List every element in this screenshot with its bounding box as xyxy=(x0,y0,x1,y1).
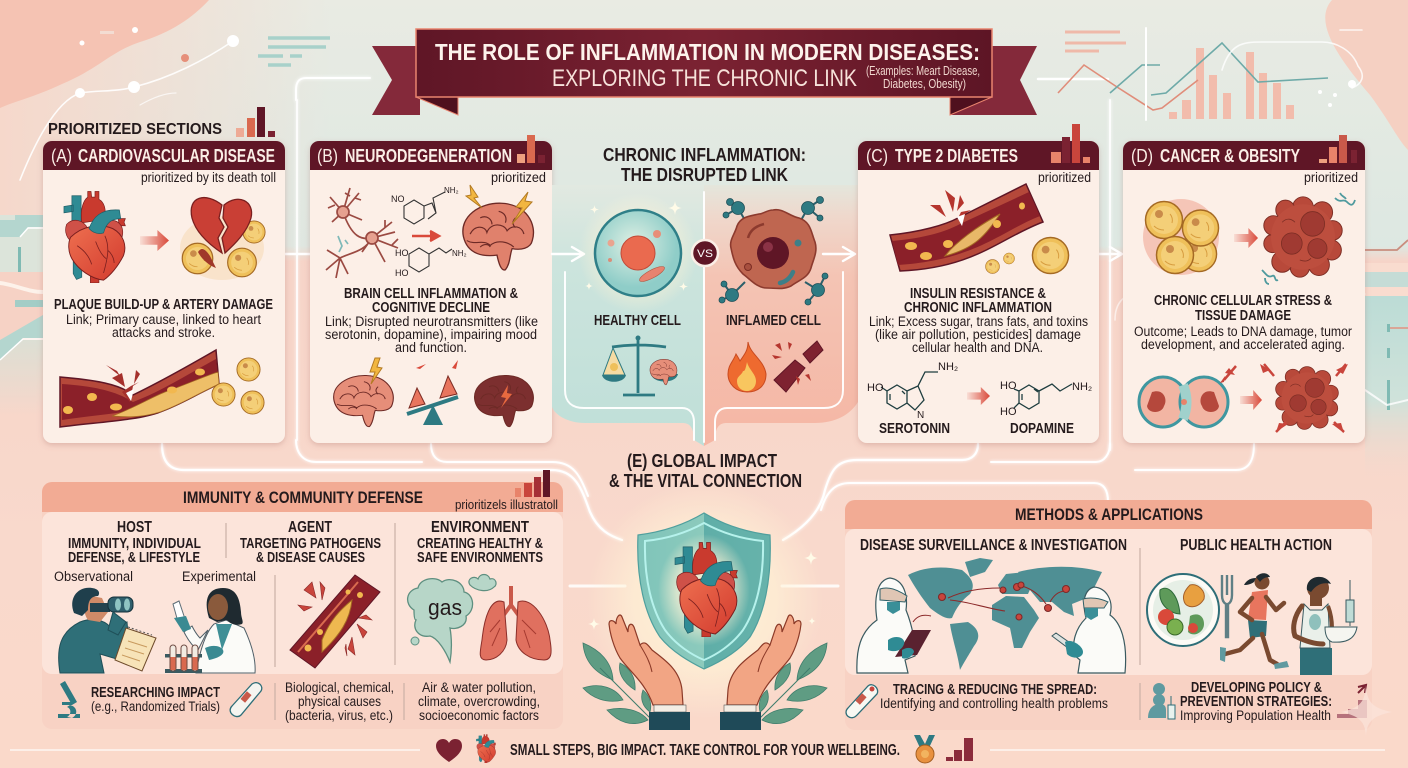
global impact heading xyxy=(609,451,802,491)
prioritized sections label: PRIORITIZED SECTIONS xyxy=(48,121,222,138)
bars xyxy=(515,470,550,497)
teal half xyxy=(552,185,704,446)
title line two: EXPLORING THE CHRONIC LINK xyxy=(552,65,857,92)
bar icon xyxy=(236,107,275,137)
icon: gas cloud xyxy=(408,574,496,662)
heading D: (D) xyxy=(1131,146,1153,166)
icon: person with bowl and syringe xyxy=(1294,577,1357,675)
column: environment: CREATING HEALTHY & xyxy=(417,536,543,552)
icon: scientist xyxy=(165,588,255,673)
footer: researching impact: (e.g., Randomized Trials) xyxy=(91,699,220,714)
decorative chart top right xyxy=(1058,28,1362,120)
icon: brain with lightning xyxy=(463,185,533,270)
title examples note: (Examples: Meart Disease, xyxy=(866,63,980,78)
icon: healthy brain xyxy=(334,358,393,427)
icon: neurons xyxy=(326,188,398,278)
left leaves xyxy=(583,643,651,724)
dopamine structure: HO xyxy=(1000,406,1017,418)
icon: molecules: HO xyxy=(395,268,408,278)
bars xyxy=(517,135,545,163)
icon: anatomical heart xyxy=(476,734,496,763)
sub-heading: TISSUE DAMAGE xyxy=(1195,308,1291,324)
sub-heading: CHRONIC CELLULAR STRESS & xyxy=(1154,293,1332,309)
VS badge xyxy=(692,240,718,266)
heading A: CARDIOVASCULAR DISEASE xyxy=(78,146,275,166)
pink half xyxy=(704,185,858,446)
title examples note xyxy=(866,63,980,91)
sub-heading xyxy=(344,286,518,316)
right leaves xyxy=(759,643,827,724)
heart xyxy=(675,542,737,637)
panel: immunity and community defense xyxy=(42,470,563,729)
label healthy: HEALTHY CELL xyxy=(594,312,681,329)
bars xyxy=(1051,124,1090,163)
heading C: (C) xyxy=(866,146,888,166)
icon: broken heart and fat cells xyxy=(180,198,265,280)
panel: C type 2 diabetes xyxy=(858,124,1099,443)
sub-heading: BRAIN CELL INFLAMMATION & xyxy=(344,286,518,302)
sub-heading: COGNITIVE DECLINE xyxy=(372,300,490,316)
dopamine structure: HO xyxy=(1000,380,1017,392)
VS badge: VS xyxy=(697,248,713,260)
outcome text: Outcome; Leads to DNA damage, tumor xyxy=(1134,324,1352,339)
column: agent xyxy=(240,519,381,566)
column: environment: ENVIRONMENT xyxy=(431,519,529,536)
heading xyxy=(603,145,806,185)
icon: runner xyxy=(1220,573,1289,669)
footer: environment factors: socioeconomic factors xyxy=(419,708,539,723)
prioritized sections label xyxy=(48,107,275,138)
world map xyxy=(908,558,1102,670)
icon: dividing cell xyxy=(1139,377,1228,427)
panel: chronic inflammation centre xyxy=(552,145,1122,446)
footer: policy text xyxy=(1148,680,1392,736)
link text: cellular health and DNA. xyxy=(912,340,1043,355)
title banner xyxy=(372,29,1037,115)
icon: heart xyxy=(64,191,125,283)
icon: flame xyxy=(728,342,766,392)
icon: observer with binoculars xyxy=(59,588,156,673)
icon: right hazmat worker xyxy=(1052,587,1126,673)
link text: (like air pollution, pesticides] damage xyxy=(875,327,1081,342)
column: environment xyxy=(417,519,543,566)
panel: D cancer and obesity xyxy=(1123,135,1365,443)
icon: molecules: NH₂ xyxy=(444,186,459,195)
sub-heading: INSULIN RESISTANCE & xyxy=(910,286,1046,302)
column: host: DEFENSE, & LIFESTYLE xyxy=(68,550,200,566)
icon: molecules: HO xyxy=(395,248,408,258)
shield xyxy=(638,513,770,669)
footer: policy text: Improving Population Health xyxy=(1180,708,1331,723)
heading: CHRONIC INFLAMMATION: xyxy=(603,145,806,165)
labels: Experimental xyxy=(182,569,256,584)
serotonin structure xyxy=(867,361,958,437)
icon: red arrow xyxy=(412,231,439,241)
heading D: CANCER & OBESITY xyxy=(1160,146,1300,166)
global impact heading: & THE VITAL CONNECTION xyxy=(609,471,802,491)
heading: THE DISRUPTED LINK xyxy=(621,165,788,185)
icon: molecules: NH₂ xyxy=(452,249,467,258)
connector lines xyxy=(162,254,1254,586)
column heading: PUBLIC HEALTH ACTION xyxy=(1180,537,1332,554)
footer: policy text: PREVENTION STRATEGIES: xyxy=(1180,694,1332,710)
link text: and function. xyxy=(395,340,467,355)
heading B: NEURODEGENERATION xyxy=(345,146,512,166)
icon: left hazmat worker xyxy=(857,578,931,673)
tagline: SMALL STEPS, BIG IMPACT. TAKE CONTROL FOR YOUR WELLBEING. xyxy=(510,742,900,759)
icon: seesaw xyxy=(407,360,458,425)
note: prioritized xyxy=(491,170,546,185)
heading: METHODS & APPLICATIONS xyxy=(1015,506,1203,524)
global impact heading: (E) GLOBAL IMPACT xyxy=(627,451,777,471)
arrows to and from cells xyxy=(552,247,1122,261)
link text xyxy=(66,312,261,340)
link text: Link; Excess sugar, trans fats, and toxins xyxy=(869,314,1088,329)
icon: medal xyxy=(914,735,935,763)
banner right tail xyxy=(950,46,1037,115)
icon: lungs xyxy=(480,586,551,660)
left hand xyxy=(609,615,690,730)
heading C xyxy=(866,146,1018,166)
heading D xyxy=(1131,146,1300,166)
footer: policy text: DEVELOPING POLICY & xyxy=(1191,680,1322,696)
column: environment: SAFE ENVIRONMENTS xyxy=(417,550,543,566)
note: prioritized xyxy=(1304,170,1358,185)
heading B: (B) xyxy=(317,146,338,166)
icon: fat cell cluster xyxy=(1143,199,1219,275)
healthy cell xyxy=(578,193,698,313)
icon: tumor xyxy=(1264,197,1342,277)
panel: A cardiovascular xyxy=(43,141,285,443)
icon: squiggles xyxy=(1262,193,1355,284)
note: prioritized xyxy=(1038,170,1091,185)
banner body xyxy=(416,29,992,97)
divider and outline lines xyxy=(565,192,843,442)
link text: Link; Disrupted neurotransmitters (like xyxy=(325,314,538,329)
icon: arrow xyxy=(140,230,169,251)
icon: arrow xyxy=(967,387,990,405)
note: prioritized by its death toll xyxy=(141,170,276,185)
label inflamed: INFLAMED CELL xyxy=(726,312,821,329)
bars xyxy=(1319,135,1357,163)
heading: IMMUNITY & COMMUNITY DEFENSE xyxy=(183,489,423,507)
footer: causes xyxy=(285,680,394,723)
footer: tracing text: TRACING & REDUCING THE SPREAD: xyxy=(893,682,1097,698)
inflamed cell xyxy=(719,196,828,305)
icon: gas cloud: gas xyxy=(428,595,462,620)
shield inner glow xyxy=(658,534,750,646)
icon: bars xyxy=(946,738,973,761)
column: host xyxy=(68,519,201,566)
link text: serotonin, dopamine), impairing mood xyxy=(325,327,537,342)
icon: arrow xyxy=(1240,390,1262,410)
footer: tracing text: Identifying and controlling health problems xyxy=(880,696,1108,711)
footer: researching impact xyxy=(58,681,262,718)
serotonin structure: HO xyxy=(867,382,884,394)
shield inner line xyxy=(645,523,763,660)
footer: environment factors: climate, overcrowding, xyxy=(418,694,540,709)
outcome text: development, and accelerated aging. xyxy=(1141,337,1345,352)
map trace arrows and pins xyxy=(938,582,1070,620)
banner left tail xyxy=(372,46,420,115)
heading A: (A) xyxy=(51,146,72,166)
right hand xyxy=(720,615,801,730)
icon: arrow xyxy=(1234,228,1258,248)
column: agent: TARGETING PATHOGENS xyxy=(240,536,381,552)
serotonin structure: NH₂ xyxy=(938,361,958,373)
title examples note: Diabetes, Obesity) xyxy=(883,76,966,91)
dopamine structure: DOPAMINE xyxy=(1010,420,1074,437)
link text: Link; Primary cause, linked to heart xyxy=(66,312,261,327)
link text xyxy=(869,314,1088,355)
panel: B neurodegeneration xyxy=(310,135,552,443)
footer: causes: physical causes xyxy=(298,694,381,709)
labels xyxy=(54,569,256,584)
column: host: HOST xyxy=(117,519,152,536)
column: agent: & DISEASE CAUSES xyxy=(256,550,365,566)
footer: causes: Biological, chemical, xyxy=(285,680,394,695)
icon: heart xyxy=(436,739,462,762)
dopamine structure: NH₂ xyxy=(1072,381,1092,393)
heading C: TYPE 2 DIABETES xyxy=(895,146,1018,166)
serotonin structure: N xyxy=(917,410,924,421)
icon: broken vessel xyxy=(772,341,823,392)
icon: food plate xyxy=(1147,574,1219,646)
sub-heading xyxy=(1154,293,1332,324)
panel: methods and applications xyxy=(845,500,1392,736)
link text xyxy=(325,314,538,355)
sub-heading: CHRONIC INFLAMMATION xyxy=(904,300,1052,316)
icon: balance scale xyxy=(602,336,678,395)
icon: damaged brain xyxy=(475,375,533,427)
icon: compressed tumor with arrows xyxy=(1220,364,1348,433)
decorative network top left xyxy=(20,27,330,180)
footer: environment factors xyxy=(418,680,540,723)
outcome text xyxy=(1134,324,1352,352)
icon: fork xyxy=(1222,575,1232,637)
column: host: IMMUNITY, INDIVIDUAL xyxy=(68,536,201,552)
bottom tagline bar xyxy=(10,734,1385,763)
note: prioritizels illustratoll xyxy=(455,498,558,512)
sub-heading: PLAQUE BUILD-UP & ARTERY DAMAGE xyxy=(54,297,273,313)
column: agent: AGENT xyxy=(288,519,332,536)
icon: molecules xyxy=(391,186,467,278)
footer: environment factors: Air & water pollution, xyxy=(422,680,536,695)
serotonin structure: SEROTONIN xyxy=(879,420,950,437)
dopamine structure xyxy=(1000,380,1092,437)
sub-heading xyxy=(904,286,1052,316)
icon: molecules: NO xyxy=(391,194,404,204)
icon: damaged artery xyxy=(290,575,380,668)
footer: causes: (bacteria, virus, etc.) xyxy=(285,708,393,723)
link text: attacks and stroke. xyxy=(112,325,215,340)
title line one: THE ROLE OF INFLAMMATION IN MODERN DISEASES: xyxy=(435,39,980,65)
footer: tracing text xyxy=(846,682,1108,718)
column heading: DISEASE SURVEILLANCE & INVESTIGATION xyxy=(860,537,1127,554)
artery illustration xyxy=(60,350,264,427)
labels: Observational xyxy=(54,569,133,584)
artery illustration xyxy=(890,184,1069,274)
footer: researching impact: RESEARCHING IMPACT xyxy=(91,685,220,701)
shield and hands xyxy=(583,482,827,730)
